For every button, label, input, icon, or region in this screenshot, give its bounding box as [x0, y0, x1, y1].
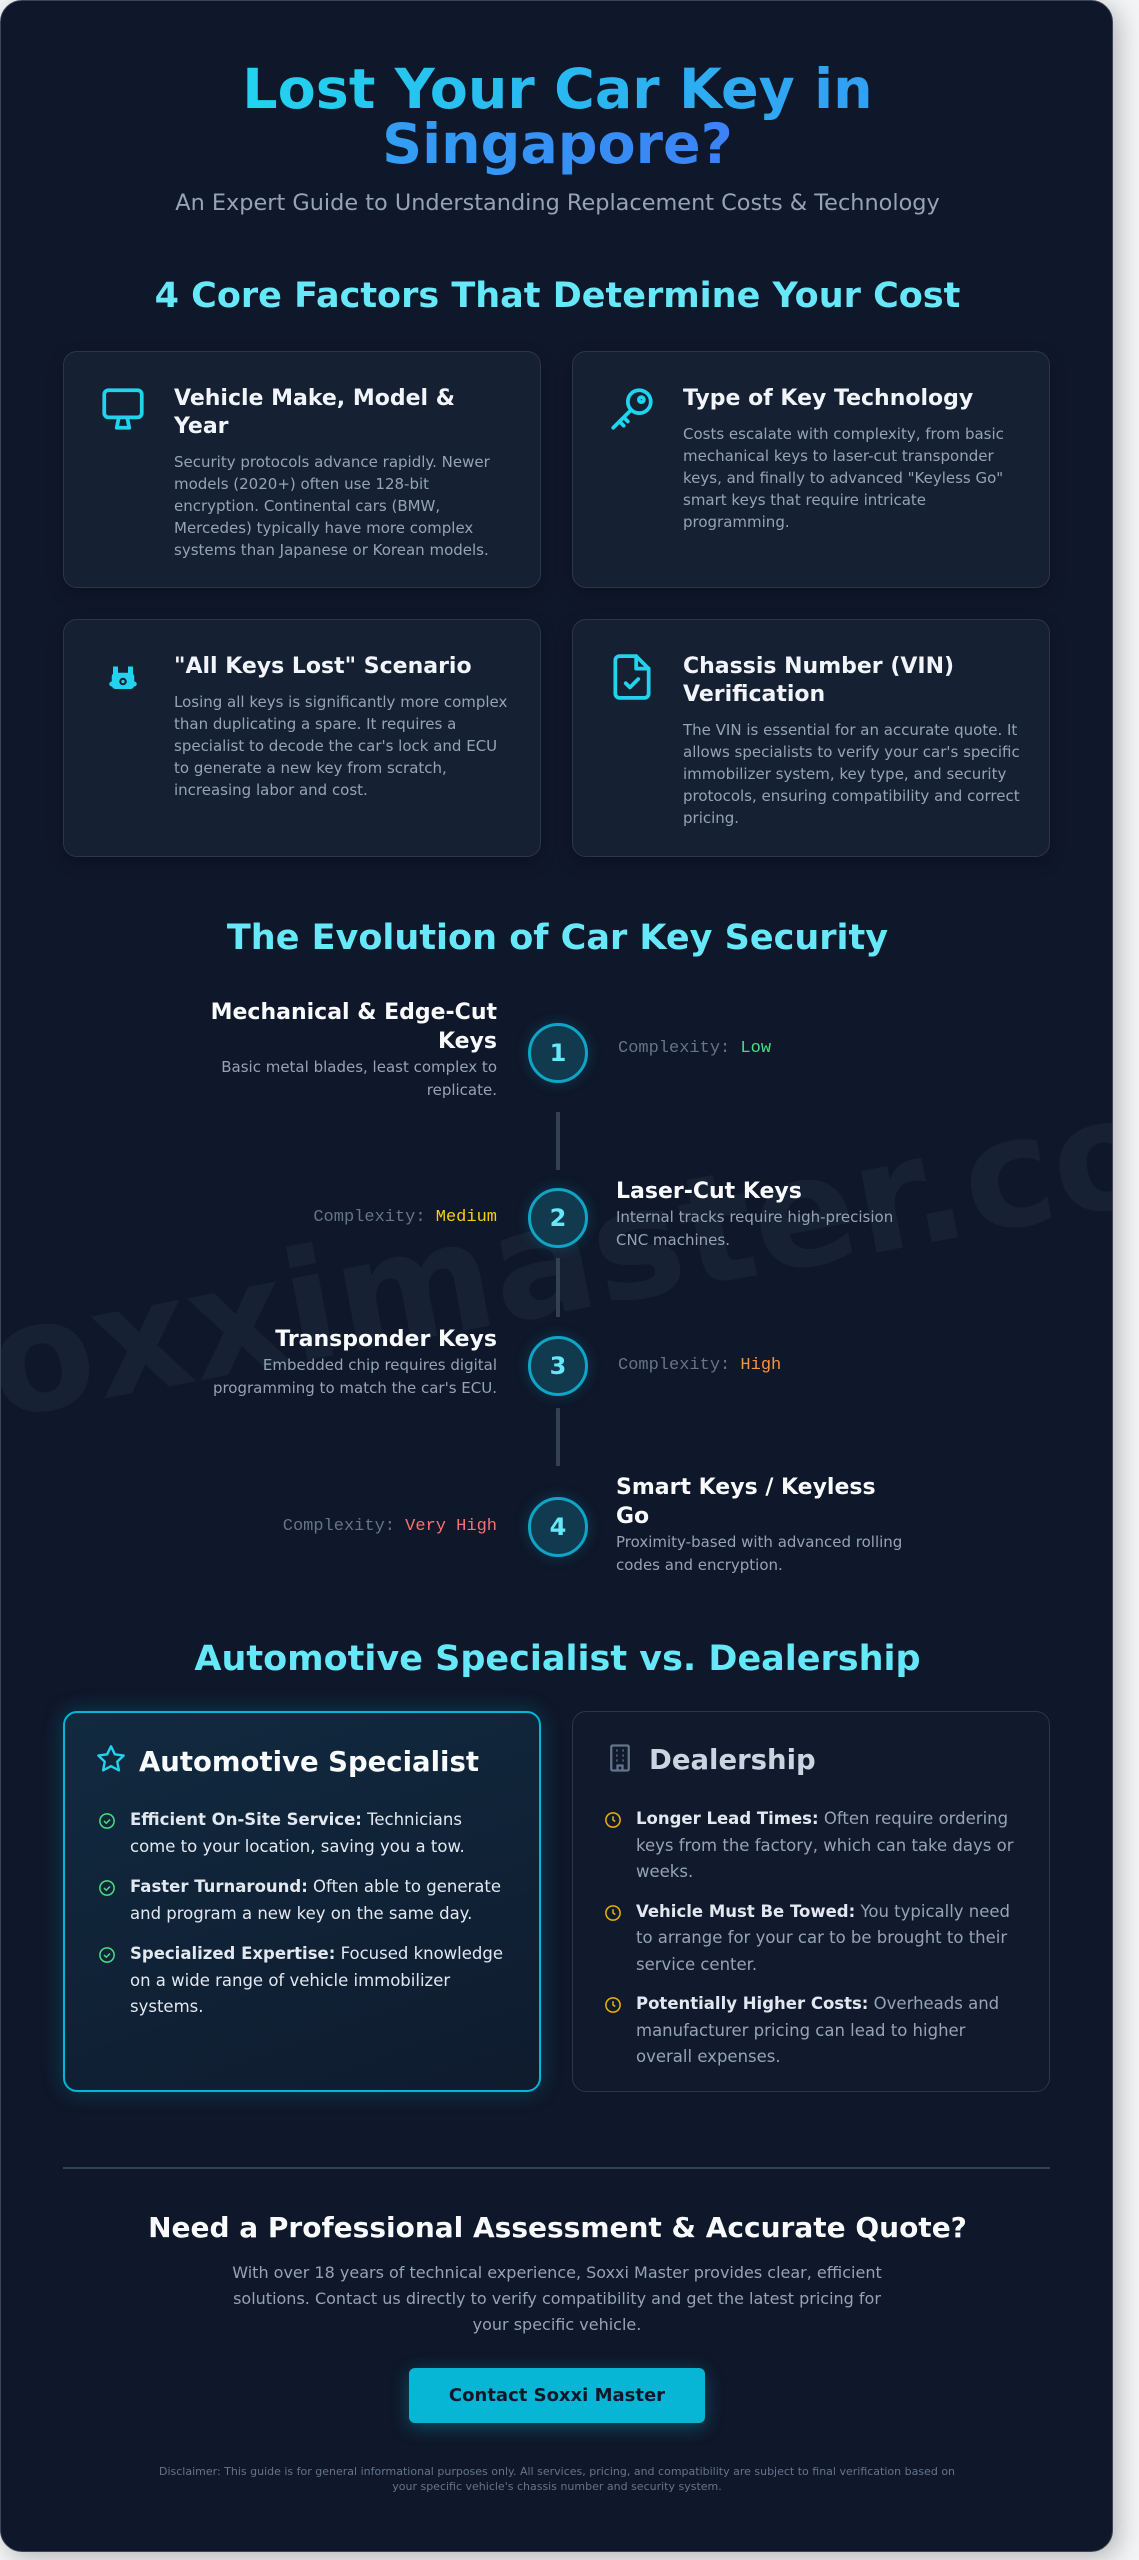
step 4: 4: [550, 1513, 566, 1541]
list: specialist benefits: [99, 1810, 503, 2016]
step 1: Basic metal blades, least complex to replicate.: [221, 1058, 497, 1099]
text: vehicle make: [174, 386, 490, 559]
CTA text: With over 18 years of technical experience, Soxxi Master provides clear, efficient solutions. Contact us directly to verify compatibility and get the latest pricing for your specific vehicle.: [232, 2263, 882, 2334]
step 4: Proximity-based with advanced rolling codes and encryption.: [616, 1533, 902, 1574]
button: contact: [409, 2368, 705, 2423]
panel: key technology: [572, 351, 1050, 588]
text: all keys lost: Losing all keys is significantly more complex than duplicating a spare. It requires a specialist to decode the car's lock and ECU to generate a new key from scratch, increasing labor and cost.: [174, 693, 507, 799]
panel: vehicle make: [63, 351, 541, 588]
subtitle: An Expert Guide to Understanding Replacement Costs & Technology: [175, 190, 940, 216]
list: dealership drawbacks: Potentially Higher Costs: Overheads and manufacturer pricing can lead to higher overall expenses.: [636, 1994, 999, 2066]
text: vehicle make: Security protocols advance rapidly. Newer models (2020+) often use 128-bit encryption. Continental cars (BMW, Mercedes) typically have more complex systems than Japanese or Korean models.: [174, 453, 490, 559]
step 2: 2: [550, 1204, 566, 1232]
title: [242, 57, 873, 177]
step 2: Complexity: Medium: [313, 1208, 497, 1227]
step 4: [283, 1475, 902, 1574]
step 1: Complexity: Low: [618, 1039, 771, 1058]
heading: core factors: 4 Core Factors That Determine Your Cost: [155, 276, 960, 316]
list: specialist benefits: Efficient On-Site Service: Technicians come to your location, saving you a tow.: [130, 1810, 465, 1856]
step 3: Embedded chip requires digital programming to match the car's ECU.: [213, 1356, 497, 1397]
text: VIN: Chassis Number (VIN) Verification: [683, 654, 954, 707]
step 4: Complexity: Very High: [283, 1517, 497, 1536]
text: vehicle make: Vehicle Make, Model & Year: [174, 386, 455, 439]
button: contact: Contact Soxxi Master: [449, 2385, 665, 2406]
step 2: Internal tracks require high-precision CNC machines.: [616, 1208, 893, 1249]
text: VIN: [682, 654, 1020, 827]
step 2: [313, 1179, 893, 1252]
disclaimer: Disclaimer: This guide is for general informational purposes only. All services, pricing, and compatibility are subject to final verification based on your specific vehicle's chassis number and security system.: [159, 2465, 955, 2493]
step 1: 1: [550, 1039, 566, 1067]
heading: specialist: Automotive Specialist: [139, 1746, 479, 1778]
step 3: 3: [550, 1352, 566, 1380]
step 2: Laser-Cut Keys: [616, 1179, 802, 1204]
text: all keys lost: "All Keys Lost" Scenario: [174, 654, 472, 679]
step 3: [213, 1327, 781, 1400]
icon: monitor: [102, 388, 144, 430]
heading: dealership: Dealership: [649, 1744, 816, 1776]
icon: key: [611, 388, 653, 430]
CTA heading: Need a Professional Assessment & Accurate Quote?: [148, 2211, 967, 2244]
list: dealership drawbacks: Longer Lead Times: Often require ordering keys from the factory, which can take days or weeks.: [636, 1809, 1014, 1881]
icon: file check: [613, 654, 651, 700]
step 3: Complexity: High: [618, 1356, 781, 1375]
icon: robot: [109, 666, 137, 689]
panel: VIN verification: [572, 619, 1050, 857]
timeline: [556, 1112, 560, 1466]
text: VIN: The VIN is essential for an accurate quote. It allows specialists to verify your car's specific immobilizer system, key type, and security protocols, ensuring compatibility and correct pricing.: [683, 721, 1020, 827]
panel: dealership: [572, 1711, 1050, 2092]
step 1: [211, 1000, 771, 1099]
list: specialist benefits: Specialized Expertise: Focused knowledge on a wide range of vehicle immobilizer systems.: [130, 1944, 503, 2016]
step 1: Mechanical & Edge-Cut Keys: [211, 1000, 497, 1054]
heading: comparison: Automotive Specialist vs. Dealership: [194, 1639, 921, 1679]
heading: evolution: The Evolution of Car Key Security: [227, 918, 888, 958]
panel: all keys lost: [63, 619, 541, 857]
step 3: Transponder Keys: [275, 1327, 497, 1352]
title: Singapore?: [382, 112, 733, 177]
title: Lost Your Car Key in: [242, 57, 873, 122]
list: dealership drawbacks: [605, 1809, 1014, 2066]
step 4: Smart Keys / Keyless Go: [616, 1475, 876, 1529]
text: key technology: Costs escalate with complexity, from basic mechanical keys to laser-cut transponder keys, and finally to advanced "Keyless Go" smart keys that require intricate programming.: [683, 425, 1004, 531]
list: specialist benefits: Faster Turnaround: Often able to generate and program a new key on the same day.: [130, 1877, 501, 1922]
text: key technology: Type of Key Technology: [683, 386, 973, 411]
list: dealership drawbacks: Vehicle Must Be Towed: You typically need to arrange for your car to be brought to their service center.: [636, 1902, 1010, 1974]
panel: specialist: [63, 1711, 541, 2092]
